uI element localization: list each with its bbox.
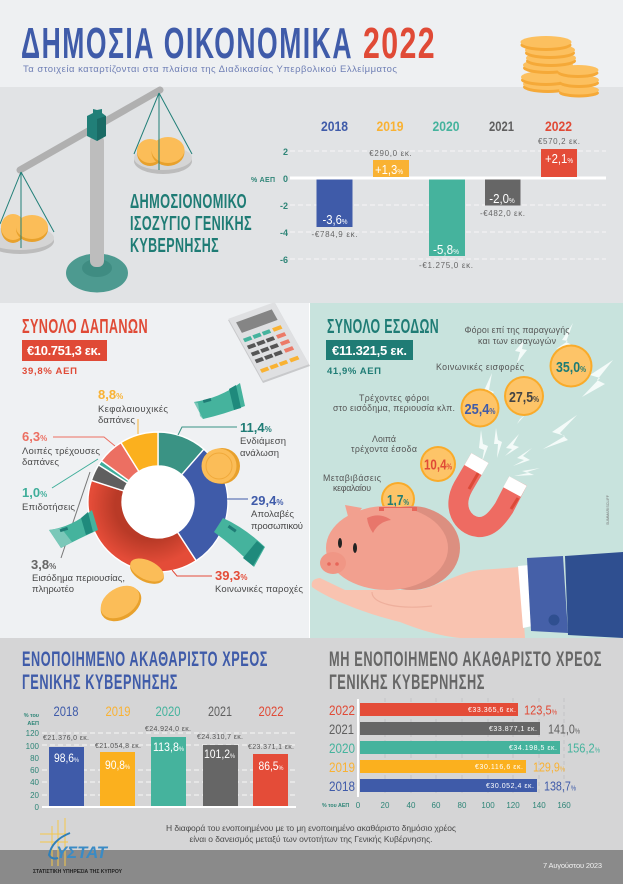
icon: coin bottom bbox=[126, 554, 168, 589]
footer bbox=[0, 850, 623, 884]
panel: header bbox=[0, 0, 623, 87]
labels: revenue categories: Λοιπά bbox=[372, 434, 396, 444]
label: intermediate consumption bbox=[178, 420, 286, 459]
bar chart: non-consolidated debt: 120 bbox=[506, 801, 520, 810]
heading: non-consolidated debt bbox=[329, 647, 602, 694]
bar chart: non-consolidated debt: 2021 bbox=[329, 721, 354, 737]
coin: capital transfers bbox=[381, 482, 415, 516]
bar chart: non-consolidated debt: 100 bbox=[481, 801, 495, 810]
bar chart: consolidated debt: 60 bbox=[30, 766, 40, 775]
bar chart: consolidated debt: 90,8% bbox=[105, 758, 130, 772]
icon: balance scale bbox=[0, 90, 192, 292]
label: intermediate consumption: ανάλωση bbox=[240, 448, 279, 459]
label: other current expenditure: Λοιπές τρέχουσες bbox=[22, 446, 100, 457]
labels: revenue categories: Μεταβιβάσεις bbox=[323, 473, 381, 483]
bar chart: non-consolidated debt: 140 bbox=[532, 801, 546, 810]
coin: production and import taxes bbox=[550, 344, 592, 388]
bar chart: budget balance: -2,0% bbox=[489, 192, 515, 206]
bar chart: budget balance: 2021 bbox=[489, 118, 514, 134]
text: revenue share: 41,9% ΑΕΠ bbox=[327, 366, 381, 377]
bar chart: consolidated debt: 80 bbox=[30, 754, 40, 763]
label: social benefits bbox=[172, 568, 303, 595]
bar chart: budget balance: -3,6% bbox=[322, 213, 348, 227]
bar chart: non-consolidated debt: 60 bbox=[432, 801, 441, 810]
bar chart: non-consolidated debt: €30.052,4 εκ. bbox=[486, 783, 534, 790]
callout: expenditure amount: €10.751,3 εκ. bbox=[27, 343, 101, 358]
bar chart: budget balance: 2 bbox=[283, 147, 288, 157]
label: compensation of employees: 29,4% bbox=[251, 493, 283, 508]
bar chart: budget balance: 2018 bbox=[321, 118, 348, 134]
bar chart: budget balance: % ΑΕΠ bbox=[251, 177, 275, 184]
bar chart: budget balance: -2 bbox=[280, 201, 288, 211]
bar chart: budget balance: 2020 bbox=[432, 118, 460, 134]
label: capital expenditure: Κεφαλαιουχικές bbox=[98, 404, 168, 415]
label: subsidies: 1,0% bbox=[22, 485, 47, 500]
heading: budget balance: ΙΣΟΖΥΓΙΟ ΓΕΝΙΚΗΣ bbox=[130, 213, 252, 235]
title: ΔΗΜΟΣΙΑ ΟΙΚΟΝΟΜΙΚΑ bbox=[21, 19, 353, 68]
coin: social contributions bbox=[504, 376, 544, 416]
coin: social contributions: 27,5% bbox=[509, 389, 539, 406]
labels: revenue categories: κεφαλαίου bbox=[333, 483, 371, 493]
bar chart: non-consolidated debt: 156,2% bbox=[567, 740, 600, 756]
label: compensation of employees: προσωπικού bbox=[251, 521, 303, 532]
icon: coin lower bbox=[94, 579, 148, 628]
bar chart: non-consolidated debt: 141,0% bbox=[548, 722, 580, 736]
bar chart: non-consolidated debt: 138,7% bbox=[544, 778, 576, 794]
bar chart: non-consolidated debt: €30.116,6 εκ. bbox=[475, 764, 523, 771]
heading: consolidated debt: ΕΝΟΠΟΙΗΜΕΝΟ ΑΚΑΘΑΡΙΣΤΟ ΧΡΕΟΣ bbox=[22, 647, 268, 671]
label: intermediate consumption: Ενδιάμεση bbox=[240, 436, 286, 447]
bar chart: consolidated debt: 2019 bbox=[106, 703, 131, 719]
labels: revenue categories: Κοινωνικές εισφορές bbox=[436, 362, 524, 372]
bar chart: consolidated debt: 2018 bbox=[54, 703, 79, 719]
labels: revenue categories: Φόροι επί της παραγωγής bbox=[464, 325, 570, 335]
text: note: Η διαφορά του ενοποιημένου με το μη ενοποιημένο ακαθάριστο δημόσιο χρέος bbox=[166, 823, 456, 833]
label: property income bbox=[31, 557, 125, 595]
label: property income: πληρωτέο bbox=[32, 584, 74, 595]
coin: other current revenue: 10,4% bbox=[424, 456, 452, 474]
icon: jacket sleeve bbox=[527, 552, 623, 638]
bar chart: consolidated debt: €24.924,0 εκ. bbox=[145, 726, 191, 733]
bar chart: non-consolidated debt: €33.365,6 εκ. bbox=[468, 707, 516, 714]
bar chart: budget balance: -4 bbox=[280, 228, 288, 238]
bar chart: non-consolidated debt: 0 bbox=[356, 801, 361, 810]
labels: revenue categories bbox=[323, 325, 570, 493]
bar chart: consolidated debt: 100 bbox=[26, 742, 40, 751]
heading: consolidated debt: ΓΕΝΙΚΗΣ ΚΥΒΕΡΝΗΣΗΣ bbox=[22, 670, 178, 694]
bar chart: consolidated debt: 101,2% bbox=[204, 747, 235, 761]
icon: banknote top bbox=[194, 383, 245, 419]
bar chart: budget balance: -€1.275,0 εκ. bbox=[419, 261, 473, 270]
text: note: είναι ο δανεισμός μεταξύ των οντοτήτων της Γενικής Κυβέρνησης. bbox=[190, 834, 432, 844]
icon: magnet bbox=[458, 458, 518, 527]
bar chart: budget balance: €570,2 εκ. bbox=[538, 137, 580, 146]
bar chart: consolidated debt: 2021 bbox=[208, 703, 232, 719]
icon: lightning bolts bbox=[479, 323, 613, 476]
icon: calculator bbox=[228, 302, 310, 383]
bar chart: budget balance bbox=[251, 118, 606, 270]
panel: debt section bbox=[0, 638, 623, 850]
bar chart: consolidated debt: 120 bbox=[26, 729, 40, 738]
bar chart: non-consolidated debt bbox=[322, 698, 600, 810]
text: expenditure share: 39,8% ΑΕΠ bbox=[22, 366, 77, 377]
callout: revenue amount: €11.321,5 εκ. bbox=[332, 343, 407, 358]
bar chart: non-consolidated debt: 160 bbox=[557, 801, 571, 810]
icon: banknote right bbox=[214, 518, 265, 567]
label: other current expenditure bbox=[22, 429, 115, 468]
label: subsidies: Επιδοτήσεις bbox=[22, 502, 75, 513]
label: capital expenditure: 8,8% bbox=[98, 387, 123, 402]
label: capital expenditure: δαπάνες bbox=[98, 415, 135, 426]
label: compensation of employees bbox=[227, 493, 303, 532]
bar chart: budget balance: +2,1% bbox=[545, 152, 573, 166]
heading: total expenditure: ΣΥΝΟΛΟ ΔΑΠΑΝΩΝ bbox=[22, 315, 148, 338]
bar chart: budget balance: -5,8% bbox=[433, 243, 459, 257]
leader line: property income bbox=[61, 472, 90, 558]
bar chart: consolidated debt bbox=[24, 703, 296, 812]
bar chart: budget balance: -6 bbox=[280, 255, 288, 265]
bar chart: consolidated debt: 113,8% bbox=[153, 740, 184, 754]
icon: piggy bank bbox=[320, 505, 460, 590]
callout: expenditure amount bbox=[22, 340, 107, 361]
bar chart: budget balance: -€482,0 εκ. bbox=[480, 209, 525, 218]
heading: budget balance: ΔΗΜΟΣΙΟΝΟΜΙΚΟ bbox=[130, 191, 247, 213]
bar chart: non-consolidated debt: 129,9% bbox=[533, 760, 565, 774]
text: date: 7 Αυγούστου 2023 bbox=[543, 861, 602, 870]
label: other current expenditure: 6,3% bbox=[22, 429, 47, 444]
bar chart: non-consolidated debt: €33.877,1 εκ. bbox=[489, 726, 537, 733]
heading: consolidated debt bbox=[22, 647, 268, 694]
bar chart: budget balance: €290,0 εκ. bbox=[369, 149, 412, 158]
bar chart: consolidated debt: 20 bbox=[30, 791, 40, 800]
bar chart: consolidated debt: % του bbox=[24, 713, 39, 719]
label: property income: Εισόδημα περιουσίας, bbox=[32, 573, 125, 584]
logo: statistical service: ΣΤΑΤΙΣΤΙΚΗ ΥΠΗΡΕΣΙΑ ΤΗΣ ΚΥΠΡΟΥ bbox=[33, 869, 122, 875]
subtitle: Τα στοιχεία καταρτίζονται στα πλαίσια της Διαδικασίας Υπερβολικού Ελλείμματος bbox=[23, 64, 397, 75]
bar chart: non-consolidated debt: 2022 bbox=[329, 702, 355, 718]
bar chart: non-consolidated debt: €34.198,5 εκ. bbox=[509, 745, 557, 752]
text: note bbox=[166, 823, 456, 844]
coin: capital transfers: 1,7% bbox=[387, 492, 409, 509]
label: capital expenditure bbox=[98, 387, 168, 434]
bar chart: consolidated debt: 2020 bbox=[156, 703, 181, 719]
coin: current income taxes: 25,4% bbox=[464, 401, 496, 418]
bar chart: non-consolidated debt: % του ΑΕΠ bbox=[322, 803, 349, 809]
bar chart: non-consolidated debt: 2018 bbox=[329, 778, 355, 794]
leader line: subsidies bbox=[52, 459, 98, 488]
bar chart: non-consolidated debt: 123,5% bbox=[524, 702, 557, 718]
bar chart: consolidated debt: €21.376,0 εκ. bbox=[43, 735, 89, 742]
labels: revenue categories: στο εισόδημα, περιουσία κλπ. bbox=[333, 403, 455, 413]
labels: revenue categories: Τρέχοντες φόροι bbox=[359, 393, 429, 403]
bar chart: consolidated debt: 0 bbox=[35, 803, 40, 812]
icon: hand bbox=[312, 567, 525, 638]
bar chart: budget balance: 2019 bbox=[376, 118, 404, 134]
label: social benefits: Κοινωνικές παροχές bbox=[215, 584, 303, 595]
label: subsidies bbox=[22, 485, 75, 513]
bar chart: consolidated debt: 2022 bbox=[258, 703, 284, 719]
icon: coin on donut bbox=[202, 448, 240, 484]
bar chart: consolidated debt: €23.371,1 εκ. bbox=[248, 744, 294, 751]
logo: statistical service: ΥΣΤΑΤ bbox=[56, 843, 109, 862]
panel: budget balance bbox=[0, 36, 623, 303]
label: compensation of employees: Απολαβές bbox=[251, 509, 294, 520]
bar chart: non-consolidated debt: 40 bbox=[407, 801, 416, 810]
coin: current income taxes bbox=[460, 388, 500, 428]
bar chart: non-consolidated debt: 2019 bbox=[329, 759, 355, 775]
bar chart: consolidated debt: 86,5% bbox=[258, 759, 284, 773]
title year: 2022 bbox=[363, 19, 436, 68]
labels: revenue categories: και των εισαγωγών bbox=[478, 336, 557, 346]
label: other current expenditure: δαπάνες bbox=[22, 457, 59, 468]
labels: revenue categories: τρέχοντα έσοδα bbox=[351, 444, 417, 454]
bar chart: budget balance: +1,3% bbox=[375, 163, 403, 177]
text: image credit: SUMMARISCLIFF bbox=[606, 494, 610, 525]
bar chart: budget balance: 2022 bbox=[545, 118, 572, 134]
label: intermediate consumption: 11,4% bbox=[240, 420, 272, 435]
callout: revenue amount bbox=[326, 340, 413, 360]
bar chart: non-consolidated debt: 2020 bbox=[329, 740, 355, 756]
coin: production and import taxes: 35,0% bbox=[556, 359, 586, 376]
icon: banknote left bbox=[49, 510, 98, 548]
panel: total revenue bbox=[310, 303, 623, 638]
icon: shirt cuff bbox=[518, 565, 537, 628]
bar chart: budget balance: 0 bbox=[283, 174, 288, 184]
heading: total revenue: ΣΥΝΟΛΟ ΕΣΟΔΩΝ bbox=[327, 315, 439, 338]
bar chart: consolidated debt: 98,6% bbox=[54, 751, 79, 765]
heading: budget balance: ΚΥΒΕΡΝΗΣΗΣ bbox=[130, 235, 219, 257]
bar chart: non-consolidated debt: 20 bbox=[381, 801, 390, 810]
bar chart: consolidated debt: ΑΕΠ bbox=[27, 721, 39, 727]
heading: non-consolidated debt: ΓΕΝΙΚΗΣ ΚΥΒΕΡΝΗΣΗΣ bbox=[329, 670, 485, 694]
icon: coin stacks bbox=[520, 36, 599, 98]
panel: total expenditure bbox=[0, 302, 310, 638]
bar chart: budget balance: -€784,9 εκ. bbox=[312, 230, 358, 239]
label: property income: 3,8% bbox=[31, 557, 56, 572]
chart: expenditure donut bbox=[88, 432, 228, 572]
bar chart: consolidated debt: €24.310,7 εκ. bbox=[197, 734, 243, 741]
coin: other current revenue bbox=[420, 446, 456, 482]
bar chart: non-consolidated debt: 80 bbox=[458, 801, 467, 810]
heading: budget balance bbox=[130, 191, 252, 257]
logo: statistical service bbox=[33, 818, 122, 875]
bar chart: consolidated debt: 40 bbox=[30, 778, 40, 787]
bar chart: consolidated debt: €21.054,8 εκ. bbox=[95, 743, 141, 750]
label: social benefits: 39,3% bbox=[215, 568, 247, 583]
